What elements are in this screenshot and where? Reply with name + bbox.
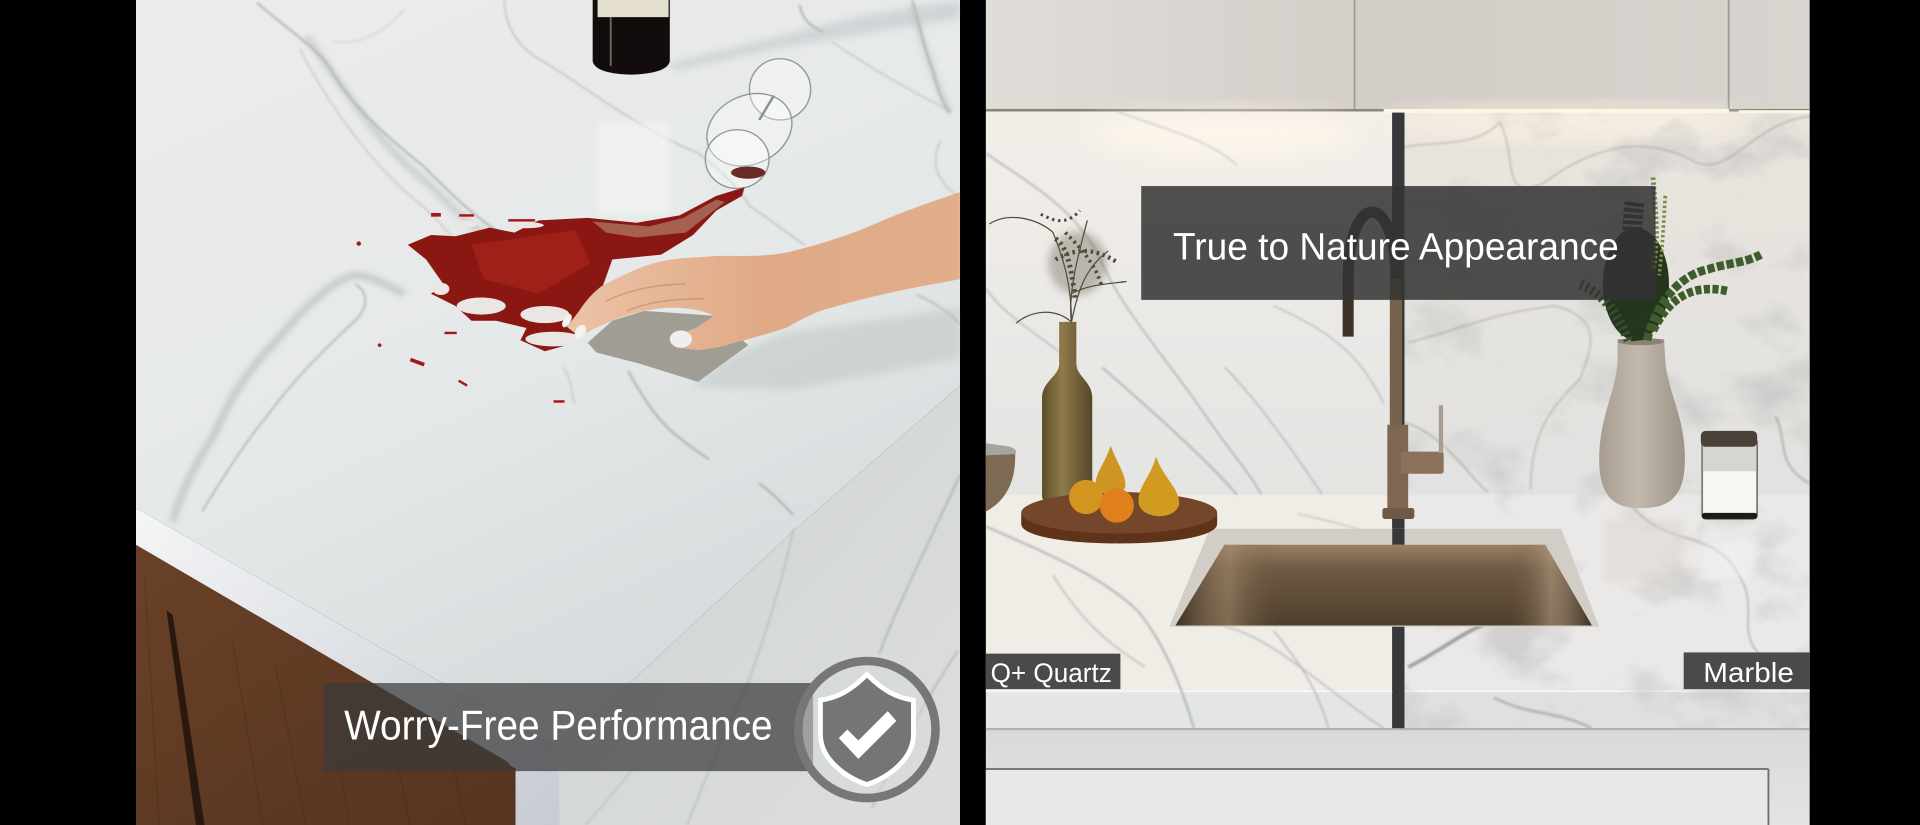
countertop edge bbox=[986, 690, 1810, 728]
panel: worry-free performance bbox=[136, 0, 960, 825]
natural marble veins bbox=[1404, 116, 1810, 728]
side face of the waterfall countertop bbox=[558, 386, 960, 825]
jar and vase reflections bbox=[1604, 520, 1756, 581]
marble veins on the countertop bbox=[202, 0, 960, 825]
white front edge strip bbox=[136, 508, 560, 825]
grey cloth bbox=[588, 311, 748, 382]
quartz backsplash bbox=[986, 111, 1392, 495]
under-cabinet light bbox=[1090, 108, 1810, 157]
countertop surface bbox=[136, 0, 960, 749]
bronze bottle vase bbox=[1042, 322, 1092, 503]
stone vase bbox=[1599, 338, 1685, 508]
marble backsplash bbox=[1404, 111, 1810, 495]
caption band: true to nature appearance: True to Nature Appearance bbox=[1173, 227, 1619, 268]
green plant bbox=[1580, 177, 1761, 340]
caption band: true to nature appearance bbox=[1141, 186, 1656, 300]
hand wiping the spill bbox=[560, 192, 960, 350]
quartz veins bbox=[986, 111, 1384, 728]
icon: wine bottle bbox=[593, 0, 670, 75]
glass jar of milk bbox=[1701, 431, 1757, 519]
faucet bbox=[1348, 212, 1444, 519]
label: Marble: Marble bbox=[1703, 657, 1794, 688]
marble countertop bbox=[1404, 495, 1810, 692]
label: Marble bbox=[1684, 652, 1810, 689]
dried flowers bbox=[989, 211, 1127, 323]
label: Q+ Quartz: Q+ Quartz bbox=[991, 658, 1112, 688]
marble mottled texture bbox=[1404, 113, 1810, 728]
icon: tipped wine glass bbox=[695, 59, 811, 189]
wood serving board bbox=[1021, 492, 1217, 543]
wine spill bbox=[357, 187, 744, 403]
quartz countertop bbox=[986, 495, 1392, 692]
panel: true to nature appearance bbox=[986, 0, 1810, 825]
caption band: worry-free performance: Worry-Free Performance bbox=[344, 701, 773, 748]
wood cabinet bbox=[136, 545, 516, 825]
caption band: worry-free performance bbox=[323, 683, 813, 771]
divider between quartz and marble bbox=[1392, 113, 1404, 728]
pears and oranges bbox=[1069, 446, 1179, 523]
upper cabinets bbox=[986, 0, 1810, 111]
icon: shield check badge bbox=[798, 661, 936, 798]
soft wide marble veining bbox=[173, 6, 950, 521]
base cabinets bbox=[986, 728, 1810, 825]
reflection and shadows bbox=[598, 0, 960, 389]
steel bowl bbox=[986, 443, 1016, 512]
sink bbox=[1169, 529, 1599, 627]
